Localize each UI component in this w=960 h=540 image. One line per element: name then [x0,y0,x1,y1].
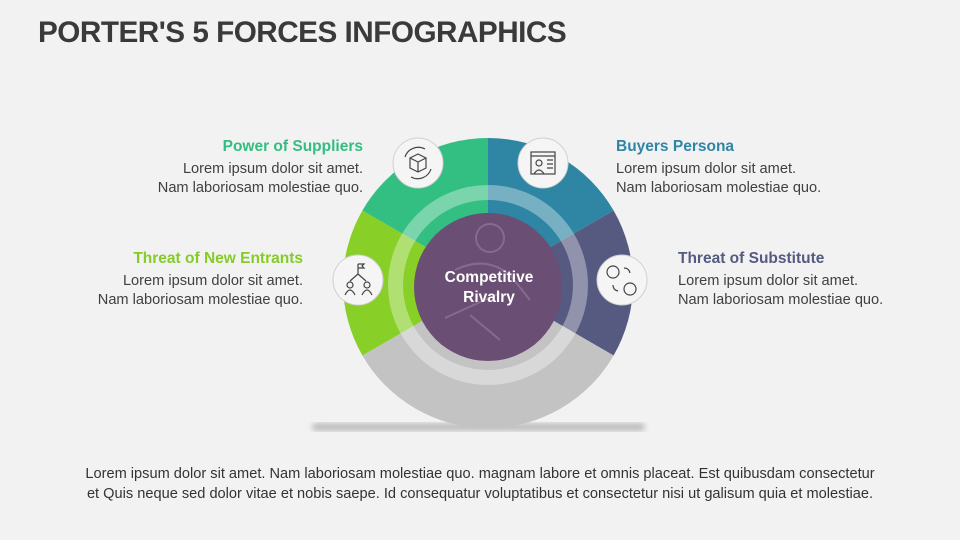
center: competitive rivalry [414,213,562,361]
text: threat of substitute: Nam laboriosam molestiae quo. [678,292,883,308]
center: competitive rivalry: Competitive [445,269,534,286]
segment: new entrants [343,210,488,356]
segment: suppliers [362,138,488,283]
text: power of suppliers [158,138,363,196]
text: threat of new entrants: Nam laboriosam molestiae quo. [98,292,303,308]
text: buyers persona: Lorem ipsum dolor sit amet. [616,161,796,177]
footer text: et Quis neque sed dolor vitae et nobis saepe. Id consequatur voluptatibus et consectetur nisi ut galisum quia et molestiae. [87,486,873,502]
segment: substitute [488,210,633,356]
title: PORTER'S 5 FORCES INFOGRAPHICS [38,16,566,49]
text: buyers persona: Buyers Persona [616,138,734,155]
icon: persona [518,138,568,188]
segment: rivalry base [362,283,614,428]
footer text: Lorem ipsum dolor sit amet. Nam laboriosam molestiae quo. magnam labore et omnis placeat. Est quibusdam consectetur [85,466,875,482]
text: threat of new entrants [98,250,303,308]
text: threat of new entrants: Threat of New Entrants [133,250,303,267]
shadow [312,423,645,431]
footer text [85,466,875,502]
text: power of suppliers: Nam laboriosam molestiae quo. [158,180,363,196]
segment: buyers [488,138,614,283]
text: power of suppliers: Lorem ipsum dolor sit amet. [183,161,363,177]
icon: substitute [597,255,647,305]
icon: new entrants [333,255,383,305]
icon: box [393,138,443,188]
center: competitive rivalry: Rivalry [463,289,515,306]
text: threat of new entrants: Lorem ipsum dolor sit amet. [123,273,303,289]
text: buyers persona: Nam laboriosam molestiae quo. [616,180,821,196]
ring [396,192,580,378]
text: threat of substitute: Threat of Substitute [678,250,824,267]
text: buyers persona [616,138,821,196]
text: threat of substitute: Lorem ipsum dolor sit amet. [678,273,858,289]
text: threat of substitute [678,250,883,308]
text: power of suppliers: Power of Suppliers [223,138,363,155]
